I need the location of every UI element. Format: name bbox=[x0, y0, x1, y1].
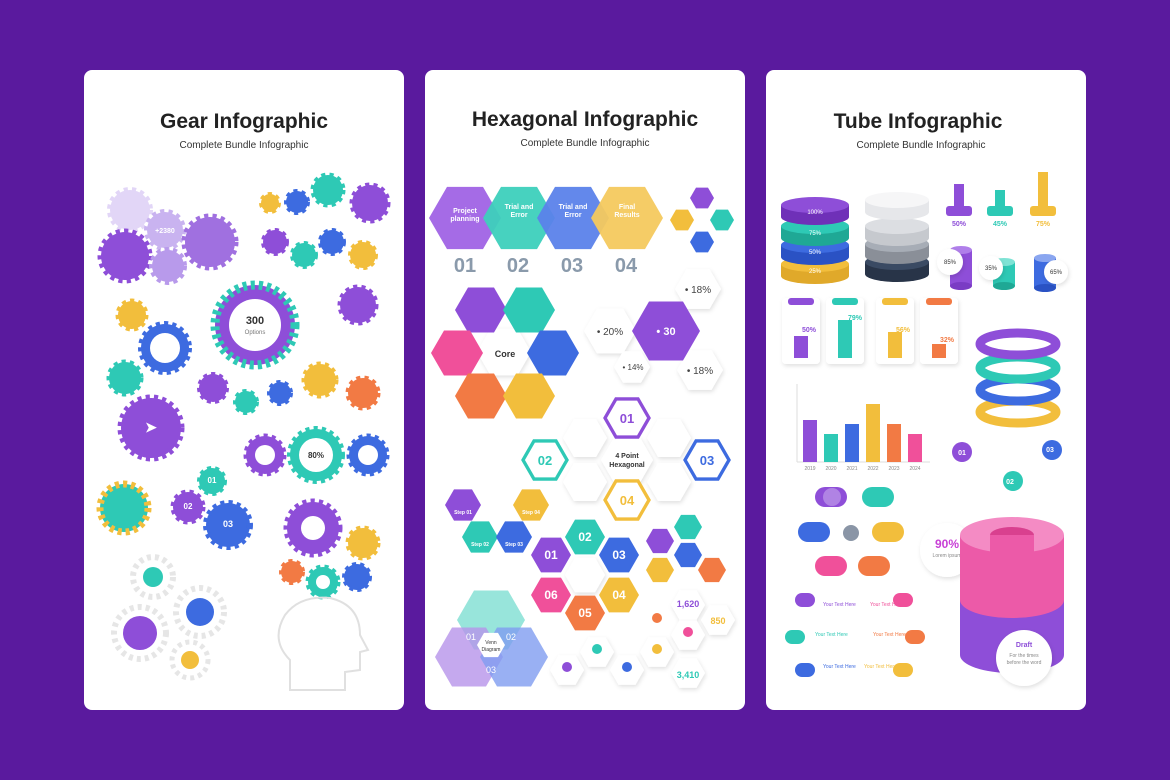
big cylinder: before the word bbox=[1007, 660, 1042, 666]
bar chart: 2022 bbox=[867, 466, 879, 472]
steps hexagons bbox=[445, 489, 549, 553]
panel: gear infographic bbox=[84, 70, 404, 710]
title: gear: Gear Infographic bbox=[160, 110, 328, 133]
small tubes with titles: 45% bbox=[993, 221, 1008, 228]
stacked discs colored: 75% bbox=[809, 231, 822, 237]
4 point hexagonal bbox=[523, 399, 729, 519]
bar chart: 2019 bbox=[804, 466, 816, 472]
gear labels: 02 bbox=[184, 502, 193, 511]
big cylinder bbox=[960, 517, 1064, 686]
numbered pills: 03 bbox=[1046, 447, 1054, 454]
core hexagon cluster: Core bbox=[495, 349, 515, 359]
steps hexagons: Step 01 bbox=[454, 510, 472, 516]
percentage hexagons: • 30 bbox=[656, 326, 676, 338]
venn diagram: 02 bbox=[506, 632, 516, 642]
stats hexagons: 3,410 bbox=[677, 670, 699, 680]
percentage hexagons: • 18% bbox=[685, 285, 711, 296]
small icon hexagons bbox=[646, 515, 726, 582]
small pill list: Your Text Here bbox=[864, 664, 897, 670]
numbered hexagon ring: 01 bbox=[544, 548, 558, 562]
percentage hexagons: • 18% bbox=[687, 366, 713, 377]
cylinder percentages bbox=[937, 246, 1068, 292]
timeline hexagons: 04 bbox=[615, 255, 638, 277]
stacked discs colored: 50% bbox=[809, 250, 822, 256]
venn diagram: 01 bbox=[466, 632, 476, 642]
stacked discs gray bbox=[865, 192, 929, 282]
timeline hexagons: planning bbox=[450, 216, 480, 223]
small hex cluster bbox=[670, 188, 734, 252]
timeline hexagons: 03 bbox=[561, 255, 583, 277]
90% callout: 90% bbox=[935, 537, 959, 551]
timeline hexagons: Final bbox=[619, 204, 635, 211]
subtitle: tube: Complete Bundle Infographic bbox=[857, 140, 985, 151]
percentage hexagons bbox=[584, 269, 723, 390]
small pill list: Your Text Here bbox=[815, 632, 848, 638]
4 point hexagonal: 04 bbox=[620, 493, 635, 508]
small pill list: Your Text Here bbox=[870, 602, 903, 608]
timeline hexagons: Results bbox=[614, 212, 640, 219]
stacked discs colored bbox=[781, 197, 849, 284]
numbered pills: 02 bbox=[1006, 479, 1014, 486]
timeline hexagons bbox=[429, 187, 663, 277]
rings stack bbox=[980, 333, 1056, 423]
numbered hexagon ring: 06 bbox=[544, 588, 558, 602]
4 point hexagonal: 4 Point bbox=[615, 453, 639, 460]
gear labels: 300 bbox=[246, 315, 264, 327]
numbered pills: 01 bbox=[958, 450, 966, 457]
timeline hexagons: Trial and bbox=[559, 204, 587, 211]
gear labels: 03 bbox=[223, 519, 233, 529]
tube cards: 79% bbox=[848, 315, 863, 322]
90% callout: Lorem ipsum bbox=[933, 553, 961, 559]
numbered hexagon ring: 02 bbox=[578, 530, 592, 544]
gear inner white centers bbox=[150, 299, 378, 589]
small tubes with titles bbox=[946, 172, 1056, 228]
cylinder percentages: 85% bbox=[944, 260, 957, 266]
gear labels: 80% bbox=[308, 451, 324, 460]
numbered pills bbox=[952, 440, 1062, 491]
steps hexagons: Step 03 bbox=[505, 542, 523, 548]
cylinder percentages: 35% bbox=[985, 266, 998, 272]
panel: tube infographic bbox=[766, 70, 1086, 710]
tube cards: 32% bbox=[940, 337, 955, 344]
steps hexagons: Step 04 bbox=[522, 510, 540, 516]
stats hexagons bbox=[550, 590, 735, 688]
icon: head outline bbox=[279, 598, 368, 690]
gear labels: Options bbox=[245, 330, 265, 336]
bar chart: 2021 bbox=[846, 466, 858, 472]
cylinder percentages: 65% bbox=[1050, 270, 1063, 276]
bar chart: 2020 bbox=[825, 466, 837, 472]
gear labels: 01 bbox=[208, 476, 217, 485]
panel: hexagonal infographic bbox=[425, 70, 745, 710]
core hexagon cluster bbox=[431, 287, 579, 419]
numbered hexagon ring bbox=[531, 520, 639, 630]
venn diagram bbox=[435, 591, 548, 686]
timeline hexagons: Error bbox=[564, 212, 582, 219]
tube cards bbox=[782, 298, 958, 364]
subtitle: hexagonal: Complete Bundle Infographic bbox=[521, 138, 649, 149]
90% callout bbox=[920, 523, 974, 577]
bar chart bbox=[797, 384, 930, 472]
small pill list: Your Text Here bbox=[873, 632, 906, 638]
4 point hexagonal: Hexagonal bbox=[609, 462, 645, 469]
timeline hexagons: Trial and bbox=[505, 204, 533, 211]
gear labels: ➤ bbox=[145, 419, 157, 435]
title: hexagonal: Hexagonal Infographic bbox=[472, 108, 698, 131]
title: tube: Tube Infographic bbox=[834, 110, 1003, 133]
subtitle: gear: Complete Bundle Infographic bbox=[180, 140, 308, 151]
gear labels: +2380 bbox=[155, 228, 175, 235]
big cylinder: Draft bbox=[1016, 642, 1033, 649]
gear labels bbox=[145, 228, 324, 529]
venn diagram: Diagram bbox=[482, 647, 500, 653]
bar chart: 2024 bbox=[909, 466, 921, 472]
venn diagram: Venn bbox=[485, 640, 497, 646]
big cylinder: For the times bbox=[1009, 653, 1039, 659]
stacked discs colored: 100% bbox=[807, 210, 823, 216]
steps hexagons: Step 02 bbox=[471, 542, 489, 548]
4 point hexagonal: 03 bbox=[700, 453, 714, 468]
timeline hexagons: 01 bbox=[454, 255, 476, 277]
timeline hexagons: Error bbox=[510, 212, 528, 219]
percentage hexagons: • 14% bbox=[622, 363, 644, 372]
stats hexagons: 1,620 bbox=[677, 599, 699, 609]
numbered hexagon ring: 03 bbox=[612, 548, 626, 562]
gears cluster bbox=[100, 175, 388, 678]
icon pill cluster bbox=[798, 487, 904, 576]
bar chart: 2023 bbox=[888, 466, 900, 472]
timeline hexagons: Project bbox=[453, 208, 478, 215]
small tubes with titles: 75% bbox=[1036, 221, 1051, 228]
small pill list: Your Text Here bbox=[823, 664, 856, 670]
percentage hexagons: • 20% bbox=[597, 327, 623, 338]
numbered hexagon ring: 04 bbox=[612, 588, 626, 602]
stats hexagons: 850 bbox=[710, 616, 726, 626]
small tubes with titles: 50% bbox=[952, 221, 967, 228]
timeline hexagons: 02 bbox=[507, 255, 529, 277]
4 point hexagonal: 01 bbox=[620, 411, 634, 426]
small pill list bbox=[785, 593, 925, 677]
venn diagram: 03 bbox=[486, 665, 496, 675]
tube cards: 50% bbox=[802, 327, 817, 334]
stacked discs colored: 25% bbox=[809, 269, 822, 275]
small pill list: Your Text Here bbox=[823, 602, 856, 608]
4 point hexagonal: 02 bbox=[538, 453, 552, 468]
numbered hexagon ring: 05 bbox=[578, 606, 592, 620]
tube cards: 56% bbox=[896, 327, 911, 334]
